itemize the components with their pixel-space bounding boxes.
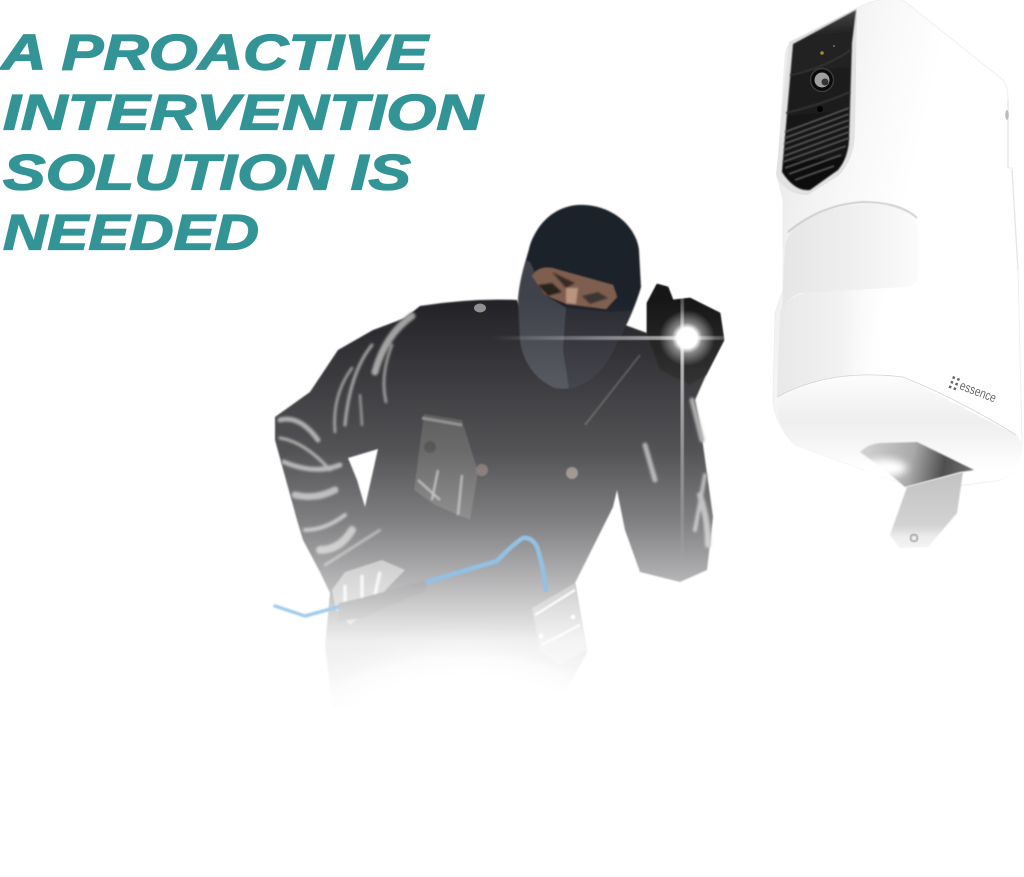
underside opening <box>860 442 974 487</box>
title <box>0 24 484 260</box>
chest pocket <box>414 414 578 520</box>
speaker grille <box>783 108 849 180</box>
title: A PROACTIVE <box>0 24 430 80</box>
flashlight hand <box>647 284 724 385</box>
brand logo <box>948 374 999 405</box>
logo dots <box>949 376 960 390</box>
balaclava lower cheek <box>517 260 569 390</box>
panel contour bands <box>786 50 851 113</box>
balaclava jaw <box>564 308 632 388</box>
sensor body <box>773 0 1022 490</box>
sleeve highlights <box>280 316 708 565</box>
title: INTERVENTION <box>3 84 484 140</box>
camera black panel <box>782 10 856 190</box>
base housing shading <box>777 278 900 397</box>
face opening <box>532 268 617 309</box>
camera bezel <box>776 8 857 195</box>
belt tab <box>532 584 582 646</box>
opening glow <box>863 459 907 477</box>
logo wordmark: essence <box>958 378 999 405</box>
strap <box>585 355 640 425</box>
paddle button <box>910 534 918 542</box>
title: SOLUTION IS <box>3 144 411 200</box>
eyes <box>538 283 562 296</box>
lower shell <box>777 375 1022 490</box>
burglar figure <box>275 200 724 707</box>
jacket and torso <box>275 284 724 707</box>
flashlight flare <box>490 295 730 560</box>
illustration: masked burglar with flashlight and crowbar <box>275 200 730 707</box>
title: NEEDED <box>3 204 259 260</box>
shoulder rivet <box>474 304 486 312</box>
PIR window <box>782 204 918 310</box>
crowbar <box>275 538 546 616</box>
right edge shadow <box>1008 100 1018 270</box>
balaclava <box>516 204 642 390</box>
housing seam <box>777 375 1016 435</box>
product: camera motion sensor <box>773 0 1022 548</box>
sensor dots <box>817 106 823 112</box>
mount paddle <box>890 472 963 548</box>
glove and lower grip <box>332 560 427 625</box>
lens <box>810 68 834 92</box>
